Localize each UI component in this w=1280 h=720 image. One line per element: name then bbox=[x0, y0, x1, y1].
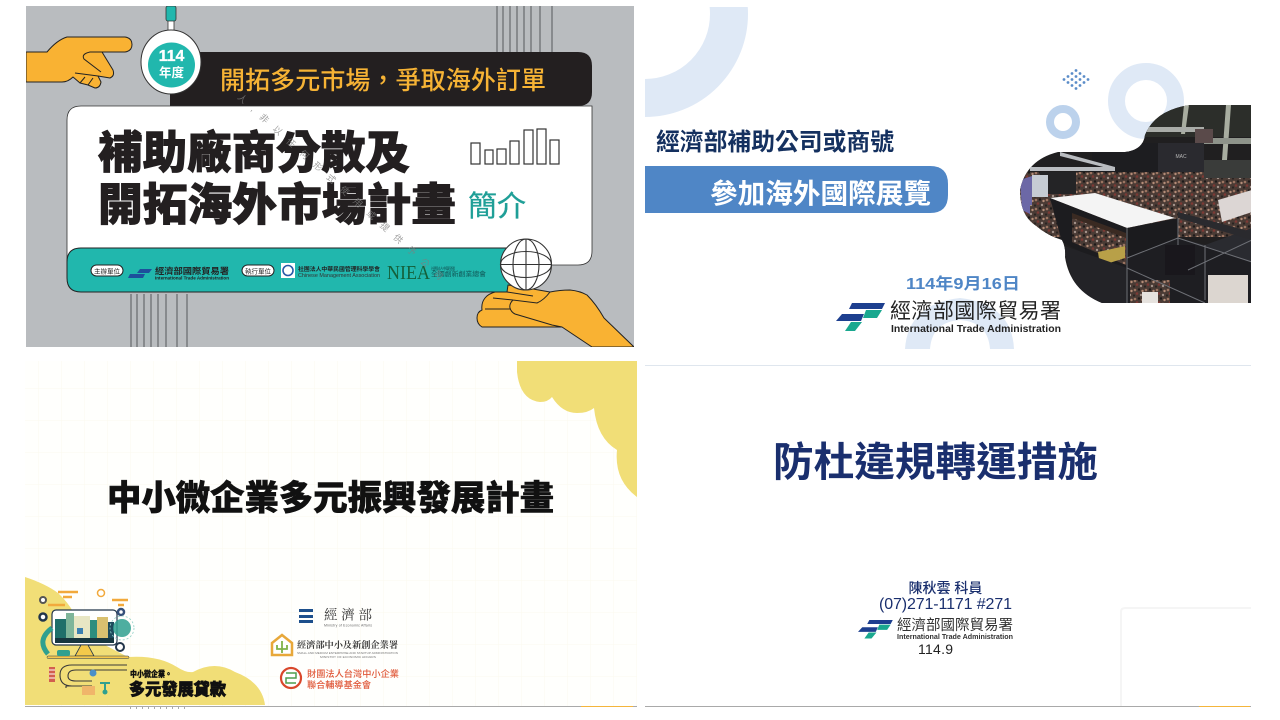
logo: Chinese Management Association bbox=[281, 263, 380, 279]
accent: panel 3 bbox=[581, 706, 633, 708]
loan slogan bbox=[129, 669, 226, 699]
top vertical stripes bbox=[497, 6, 552, 52]
logo: International Trade Administration small: 經濟部國際貿易署 bbox=[155, 265, 229, 276]
logo: SME credit guarantee foundation: 財團法人台灣中小企業 bbox=[307, 668, 399, 679]
bottom marks: panel 3 bbox=[130, 707, 188, 709]
hanging rod and teal cap bbox=[166, 6, 176, 32]
photo: exhibition hall bbox=[1015, 100, 1255, 310]
executor label bbox=[242, 265, 274, 276]
bottom rule bbox=[645, 706, 1251, 708]
logo: Ministry of Economic Affairs: Ministry of Economic Affairs bbox=[324, 624, 372, 628]
logo: SME and startup administration: MINISTRY OF ECONOMIC AFFAIRS bbox=[320, 655, 376, 659]
accent bbox=[1199, 706, 1250, 708]
logo: Ministry of Economic Affairs bbox=[299, 606, 372, 628]
logo text: Chinese name: 經濟部國際貿易署 bbox=[890, 300, 1061, 323]
year badge: 114 bbox=[159, 48, 185, 65]
bottom rule: panel 3 bbox=[25, 706, 637, 708]
black heading bar bbox=[170, 52, 592, 106]
logo mark: trade administration bbox=[836, 303, 885, 331]
sponsor label: 主辦單位 bbox=[94, 266, 120, 276]
watermark: 人,非以任何形式使用或提供予公司 bbox=[236, 91, 452, 288]
bar icon bbox=[471, 129, 559, 164]
black booth wall: MAC bbox=[1175, 154, 1187, 160]
logo: SME and startup administration: SMALL AND MEDIUM ENTERPRISE AND STARTUP ADMINISTRATION bbox=[297, 651, 398, 655]
title: 中小微企業多元振興發展計畫 bbox=[107, 480, 554, 518]
teal sponsor bar bbox=[67, 248, 530, 292]
hall roof and trusses bbox=[1140, 105, 1255, 160]
logo: International Trade Administration small bbox=[128, 266, 229, 280]
panel: anti-transshipment cover bbox=[645, 366, 1251, 706]
date number: 114.9 bbox=[918, 641, 953, 657]
panel: overseas market programme cover bbox=[26, 6, 634, 347]
logo: NIEA bbox=[388, 266, 486, 279]
logo: Chinese Management Association: 社團法人中華民國管理科學學會 bbox=[298, 265, 380, 273]
logo: NIEA: NIEA bbox=[387, 262, 430, 284]
booth interior bbox=[1050, 198, 1127, 243]
decorative bottom-left blob bbox=[25, 577, 265, 705]
date: 114年9月16日 bbox=[906, 274, 1020, 293]
crowd band bbox=[1015, 172, 1255, 237]
loan slogan: 中小微企業。 bbox=[130, 669, 172, 679]
logo: Chinese Management Association: Chinese Management Association bbox=[298, 273, 380, 279]
title: 防杜違規轉運措施 bbox=[773, 439, 1098, 485]
logo: SME and startup administration: 經濟部中小及新創企業署 bbox=[297, 639, 398, 650]
right posters bbox=[1218, 190, 1252, 222]
white title card bbox=[67, 106, 592, 265]
logo: NIEA: 社團法人中華民國 bbox=[431, 266, 455, 271]
heading: subsidised companies: 經濟部補助公司或商號 bbox=[656, 129, 894, 156]
logo: SME and startup administration bbox=[272, 635, 398, 659]
logo text: Chinese: 經濟部國際貿易署 bbox=[897, 617, 1013, 634]
decorative crescent bbox=[645, 7, 748, 117]
executor label: 執行單位 bbox=[245, 266, 272, 276]
blue banner bbox=[645, 166, 948, 213]
panel: overseas exhibition cover bbox=[645, 7, 1251, 349]
title line 1: 補助廠商分散及 bbox=[98, 128, 410, 178]
year badge: 年度 bbox=[159, 65, 184, 80]
decorative top-right blob bbox=[517, 361, 637, 497]
black booth wall bbox=[1125, 143, 1204, 172]
sponsor label bbox=[91, 265, 123, 276]
white booth roof bbox=[1050, 193, 1175, 228]
upper left truss bbox=[1030, 152, 1115, 171]
label: introduction: 簡介 bbox=[468, 190, 526, 223]
lower right booths bbox=[1127, 238, 1252, 303]
booth floor front bbox=[1062, 245, 1127, 303]
illustration: open hand bbox=[477, 285, 634, 347]
banner text: 參加海外國際展覽 bbox=[710, 178, 931, 209]
logo mark: small bbox=[858, 620, 893, 638]
logo: SME credit guarantee foundation bbox=[281, 668, 399, 690]
illustration: pointing hand bbox=[26, 37, 132, 88]
title line 2: 開拓海外市場計畫 bbox=[98, 181, 456, 230]
heading: sub title: 開拓多元市場，爭取海外訂單 bbox=[220, 67, 546, 95]
logo: NIEA: 全國創新創業總會 bbox=[431, 269, 487, 278]
panel: SME development cover bbox=[25, 361, 637, 706]
contact name: 陳秋雲 科員 bbox=[909, 580, 982, 596]
top rule bbox=[645, 364, 1251, 366]
logo text: English: International Trade Administration bbox=[897, 632, 1013, 641]
logo text: English name: International Trade Administration bbox=[891, 323, 1061, 335]
logo: Ministry of Economic Affairs: 經濟部 bbox=[324, 606, 372, 622]
illustration: globe bbox=[500, 239, 552, 290]
booth right wall bbox=[1127, 218, 1178, 258]
year badge bbox=[141, 30, 201, 94]
illustration: computer with city bbox=[40, 590, 134, 695]
decorative dot diamond bbox=[1063, 69, 1089, 90]
logo: International Trade Administration small: International Trade Administration bbox=[155, 276, 229, 280]
loan slogan: 多元發展貸款 bbox=[129, 679, 226, 699]
white note box bbox=[1121, 608, 1251, 706]
decorative bottom arch bbox=[905, 298, 1014, 349]
contact phone: (07)271-1171 #271 bbox=[879, 596, 1012, 613]
decorative small ring bbox=[1050, 109, 1076, 135]
bottom vertical stripes bbox=[131, 294, 187, 347]
logo: SME credit guarantee foundation: 聯合輔導基金會 bbox=[307, 679, 371, 690]
decorative large ring bbox=[1116, 72, 1176, 130]
left poster wall bbox=[1020, 176, 1032, 215]
